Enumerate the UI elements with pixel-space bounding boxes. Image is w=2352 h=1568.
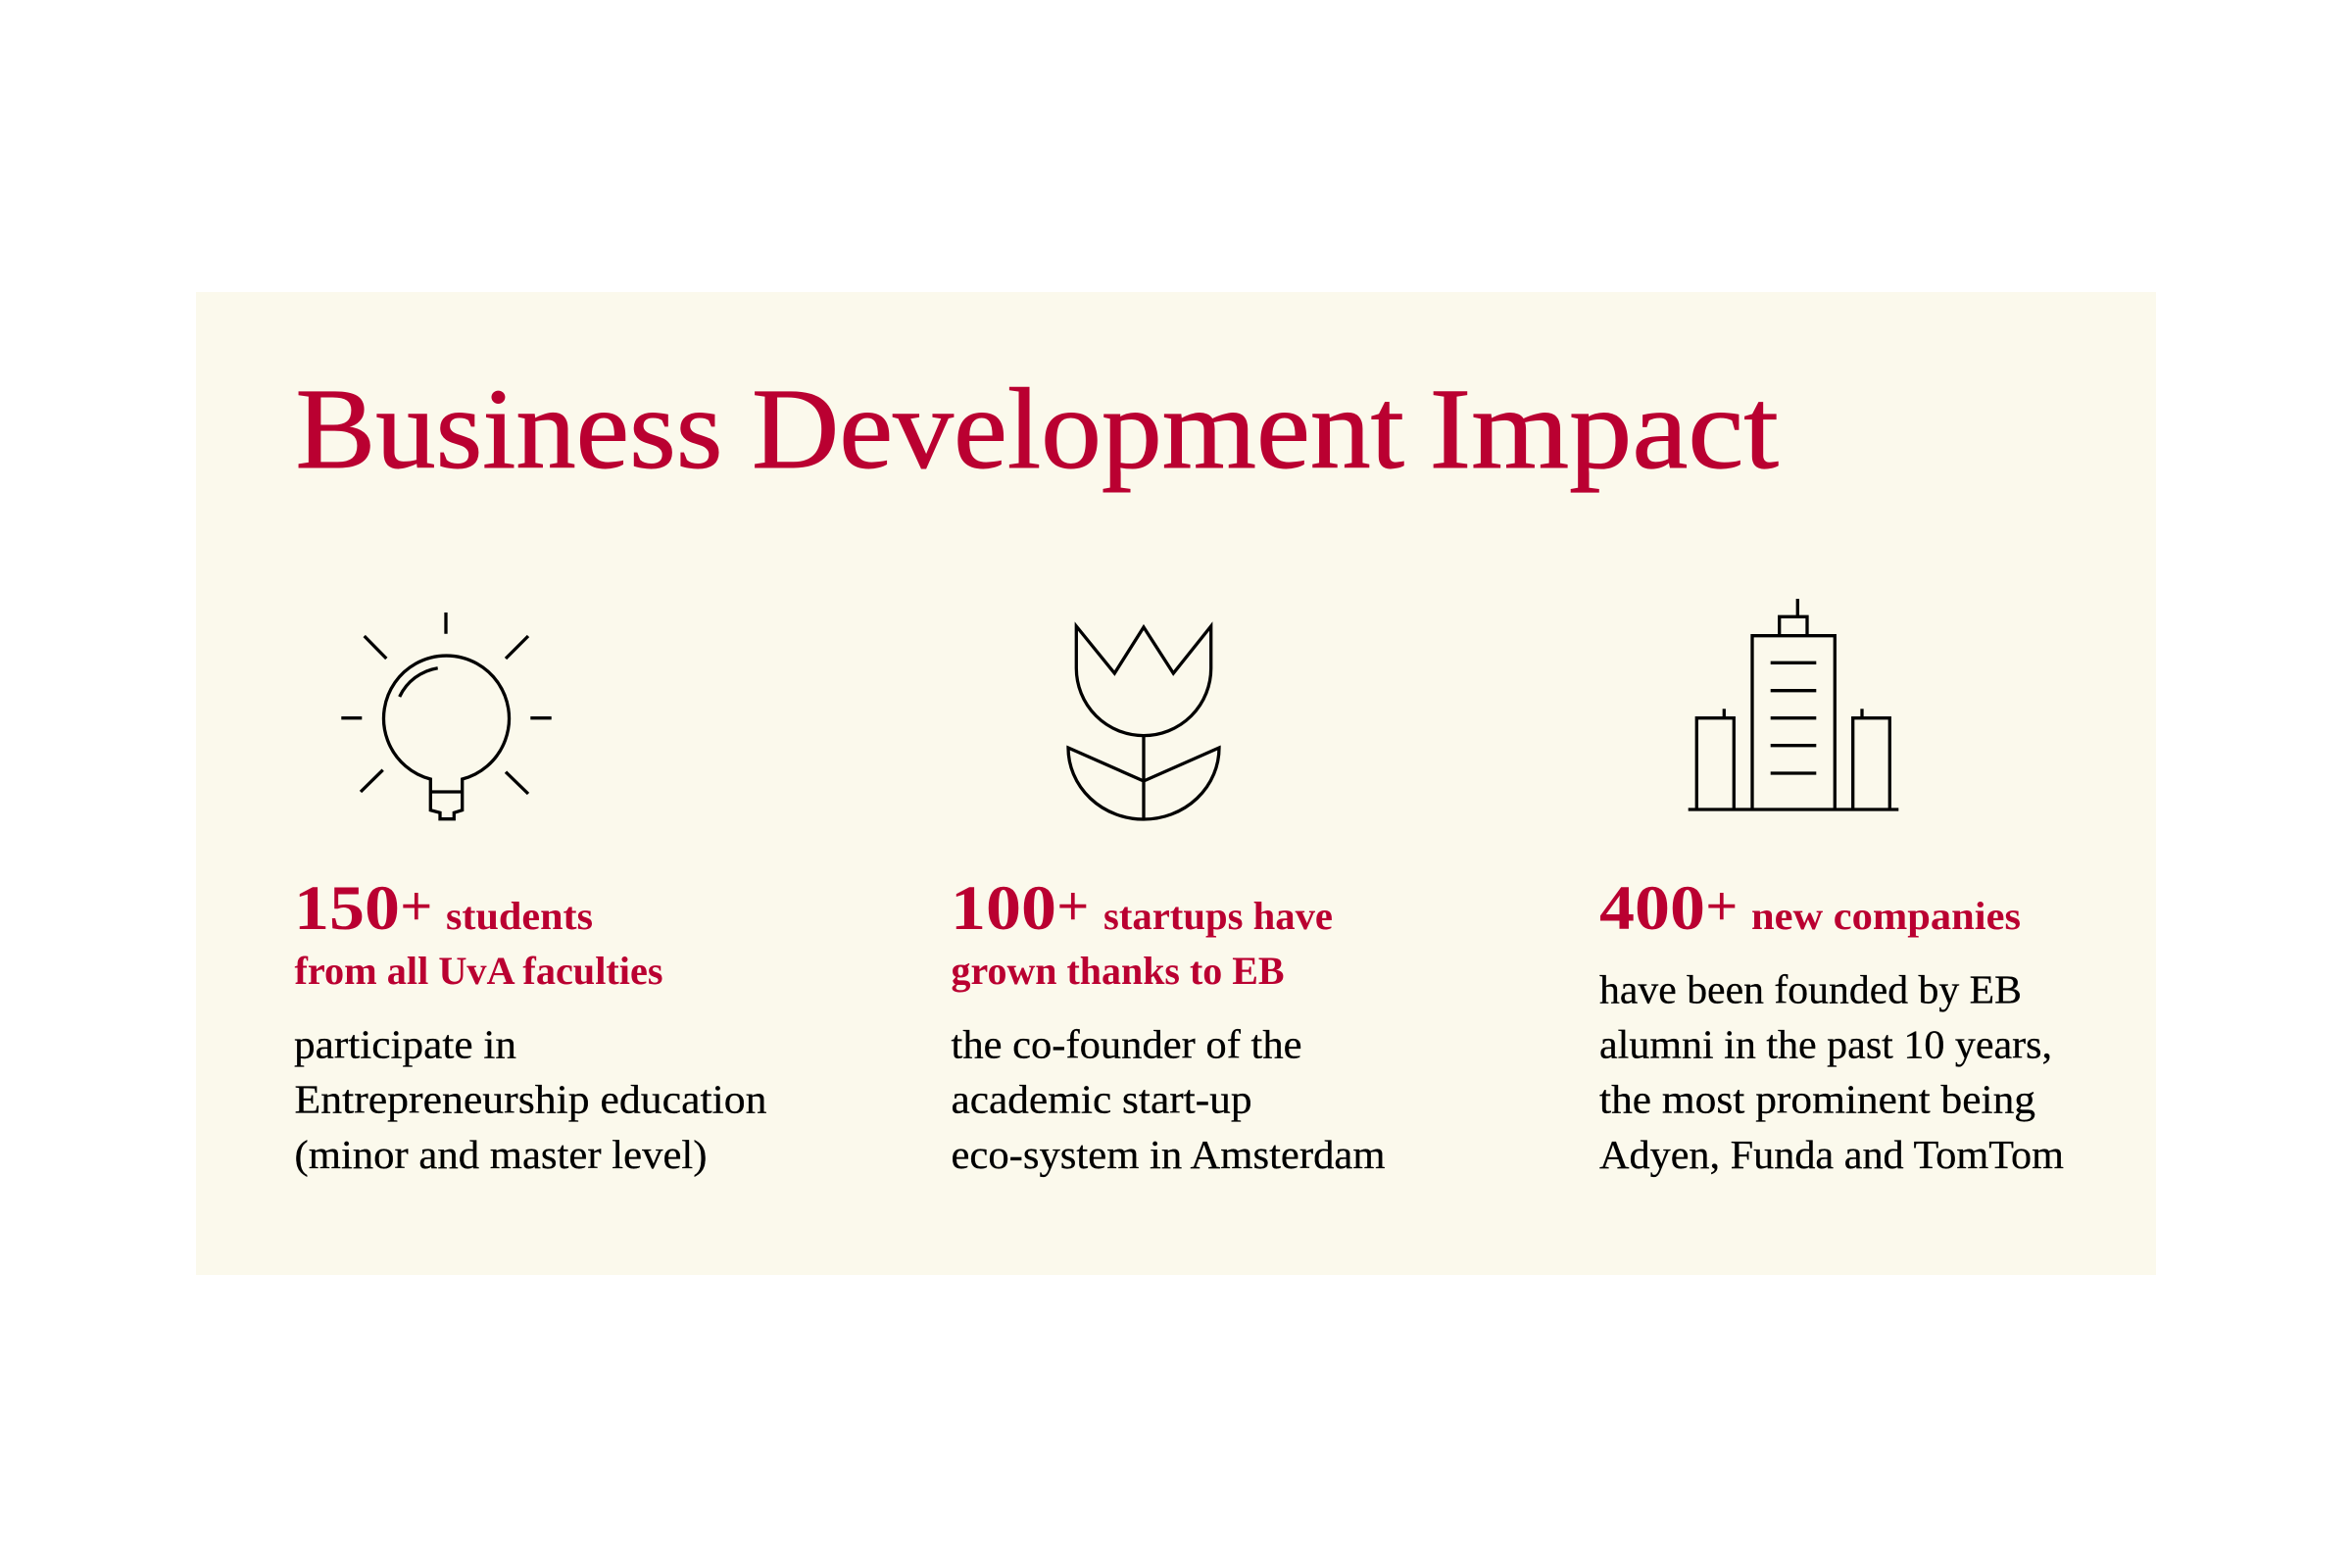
text block: companies description: the most prominent being	[1599, 1076, 2035, 1121]
stat: 100+ startups: startups have	[1103, 894, 1333, 938]
stat: 400+ new companies: 400	[1599, 873, 1705, 944]
text block: startups description: the co-founder of the	[951, 1021, 1301, 1066]
stat: 150+ students: +	[401, 876, 432, 937]
text block: students description: Entrepreneurship education	[294, 1076, 766, 1121]
icon: tulip	[1068, 626, 1219, 819]
icon: office buildings	[1689, 599, 1898, 809]
stat: 150+ students	[294, 873, 662, 993]
title: Business	[296, 365, 723, 493]
title	[296, 365, 1779, 493]
text block: students description: (minor and master level)	[294, 1132, 708, 1177]
text block: startups description: academic start-up	[951, 1076, 1252, 1121]
text block: companies description: Adyen, Funda and TomTom	[1599, 1132, 2064, 1177]
icon: light bulb	[341, 612, 552, 819]
text block: students description: participate in	[294, 1021, 516, 1066]
stat: 100+ startups: +	[1057, 876, 1089, 937]
stat: 150+ students: from all UvA faculties	[294, 949, 662, 993]
title: Development	[752, 365, 1404, 493]
stat: 400+ new companies: new companies	[1751, 894, 2021, 938]
text block: companies description: alumni in the past 10 years,	[1599, 1021, 2052, 1066]
stat: 400+ new companies: +	[1706, 876, 1738, 937]
stat: 150+ students: 150	[294, 873, 400, 944]
text block: companies description	[1599, 966, 2064, 1177]
title: Impact	[1429, 365, 1779, 493]
stat: 150+ students: students	[446, 894, 593, 938]
stat: 400+ new companies	[1599, 873, 2021, 944]
text block: students description	[294, 1021, 766, 1177]
text block: startups description	[951, 1021, 1386, 1177]
text block: companies description: have been founded by EB	[1599, 966, 2022, 1011]
panel: background	[196, 292, 2156, 1275]
stat: 100+ startups: grown thanks to EB	[951, 949, 1284, 993]
stat: 100+ startups	[951, 873, 1333, 993]
stat: 100+ startups: 100	[951, 873, 1056, 944]
text block: startups description: eco-system in Amsterdam	[951, 1132, 1386, 1177]
